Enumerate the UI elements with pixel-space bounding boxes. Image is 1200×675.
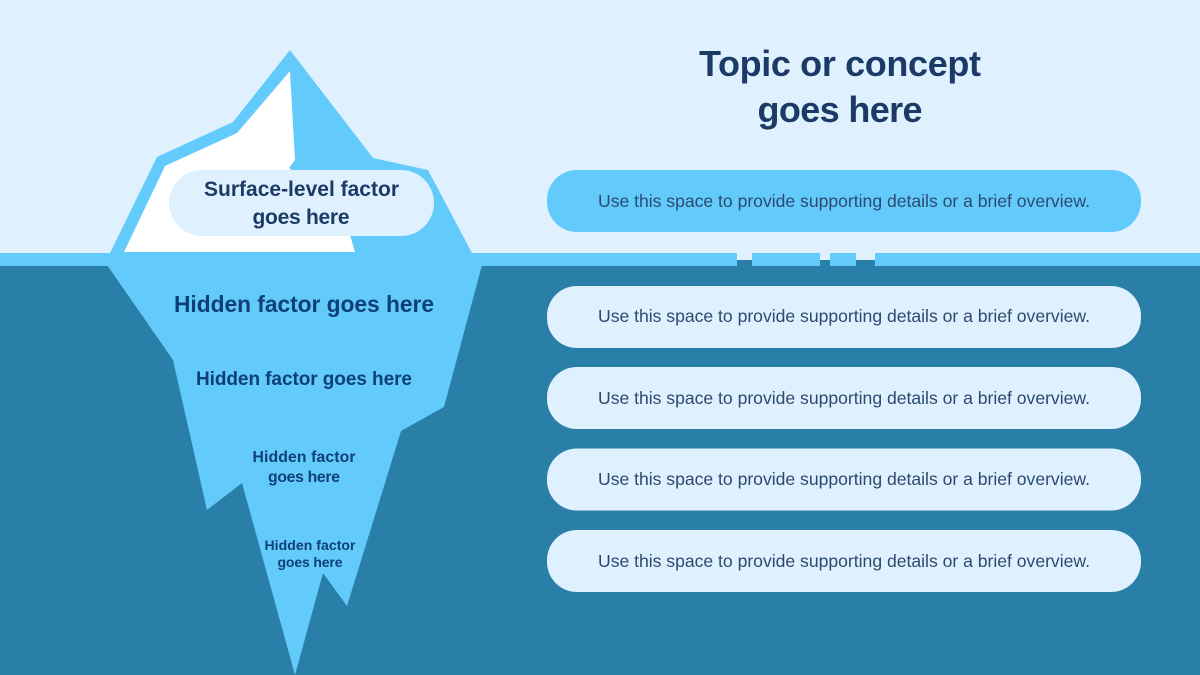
sea background xyxy=(0,254,1200,675)
iceberg above water xyxy=(107,50,482,266)
detail pill: hidden 3 xyxy=(547,448,1141,510)
waterline band with gaps xyxy=(0,253,1200,266)
detail pill: surface: Use this space to provide supporting details or a brief overview. xyxy=(598,191,1090,211)
hidden factor label 3 xyxy=(252,449,356,486)
hidden factor label 2: Hidden factor goes here xyxy=(196,369,412,390)
detail pill: hidden 2: Use this space to provide supporting details or a brief overview. xyxy=(598,388,1090,408)
surface factor label xyxy=(169,170,434,236)
hidden factor label 4 xyxy=(264,537,356,570)
hidden factor label 1: Hidden factor goes here xyxy=(174,291,434,317)
detail pill: hidden 3: Use this space to provide supporting details or a brief overview. xyxy=(598,469,1090,489)
hidden factor label 4: goes here xyxy=(278,554,343,570)
detail pill: hidden 1 xyxy=(547,286,1141,348)
title: goes here xyxy=(758,89,922,130)
surface factor label: Surface-level factor xyxy=(204,178,399,201)
title: Topic or concept xyxy=(699,43,981,84)
detail pill: hidden 4: Use this space to provide supporting details or a brief overview. xyxy=(598,551,1090,571)
hidden factor label 3: goes here xyxy=(268,469,340,486)
iceberg below water xyxy=(107,265,482,675)
detail pill: hidden 2 xyxy=(547,367,1141,429)
surface factor label: goes here xyxy=(252,206,350,229)
detail pill: hidden 1: Use this space to provide supporting details or a brief overview. xyxy=(598,306,1090,326)
title xyxy=(699,43,981,130)
hidden factor label 4: Hidden factor xyxy=(264,537,356,553)
detail pill: hidden 4 xyxy=(547,530,1141,592)
detail pill: surface xyxy=(547,170,1141,232)
iceberg white face xyxy=(124,71,355,252)
hidden factor label 3: Hidden factor xyxy=(252,449,356,466)
sky background xyxy=(0,0,1200,254)
